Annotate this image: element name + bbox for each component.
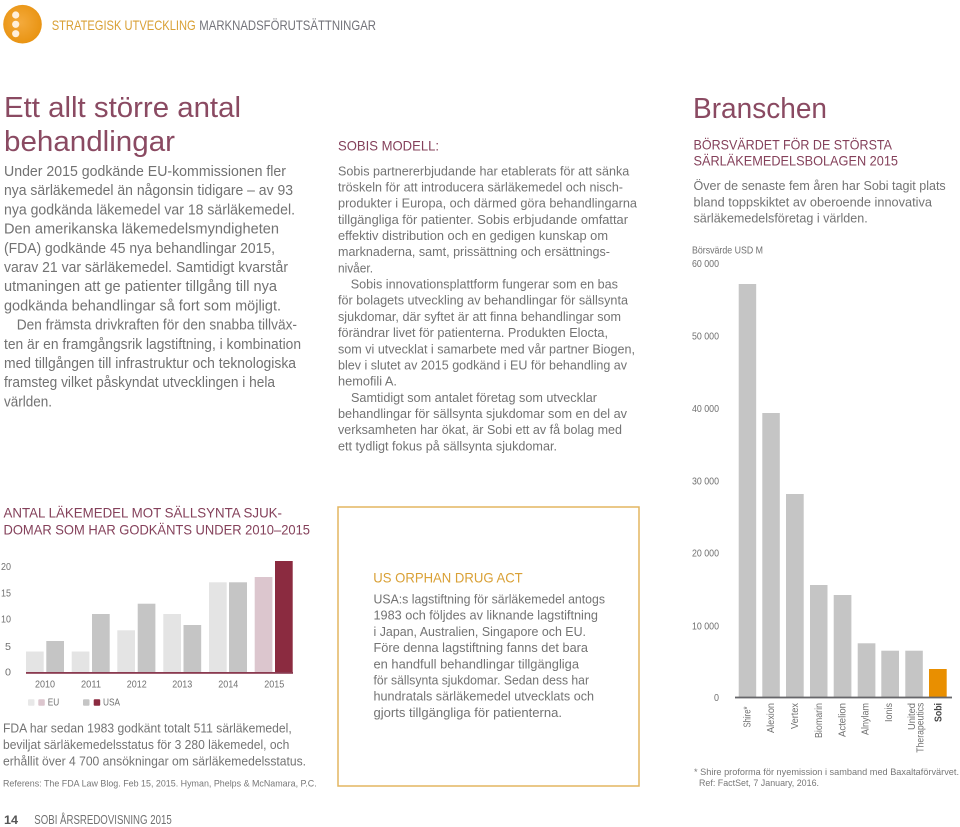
y axis labels: 60 000 [692,258,719,270]
y axis labels: 15 [1,588,11,600]
body text: godkända behandlingar så fort som möjligt. [4,298,281,314]
body text: i Japan, Australien, Singapore och EU. [374,624,586,639]
body text: framsteg vilket påskyndat utvecklingen i hela [4,375,276,391]
icon: orange circle with three dots [3,5,42,44]
company labels: Vertex [789,702,801,729]
y axis labels: 20 [1,561,11,573]
body text: med tillgången till infrastruktur och teknologiska [4,356,297,372]
body text: effektiv distribution och en gedigen kunskap om [338,228,608,243]
axis title: Börsvärde USD M [692,245,763,257]
heading: DOMAR SOM HAR GODKÄNTS UNDER 2010–2015 [4,521,310,537]
heading: Ett allt större antal [4,92,241,124]
body text: Den främsta drivkraften för den snabba tillväx- [17,318,297,334]
body text: produkter i Europa, och därmed göra behandlingarna [338,196,638,211]
y axis labels [1,561,11,679]
header [3,5,376,44]
FDA text [3,721,306,768]
y axis labels: 0 [5,667,11,679]
footnote: Ref: FactSet, 7 January, 2016. [699,778,819,789]
reference: Referens: The FDA Law Blog. Feb 15, 2015. Hyman, Phelps & McNamara, P.C. [3,778,317,789]
body text: för sällsynta sjukdomar. Sedan dess har [374,672,590,688]
heading [4,504,310,537]
intro text: Över de senaste fem åren har Sobi tagit plats [694,178,946,193]
subheading: BÖRSVÄRDET FÖR DE STÖRSTA [694,135,893,152]
body text: som vi utvecklat i samarbete med vår partner Biogen, [338,341,635,356]
heading: behandlingar [4,126,175,158]
legend: USA [103,697,120,709]
body text: varav 21 var särläkemedel. Samtidigt kvarstår [4,260,288,276]
body text: ett tydligt fokus på sällsynta sjukdomar. [338,438,557,453]
panel: Ett allt större antal behandlingar [4,92,301,410]
body text [374,592,605,720]
y axis labels: 40 000 [692,403,719,415]
company labels: United [906,703,918,730]
x axis labels: 2014 [218,678,238,690]
company labels: Alnylam [860,703,872,735]
heading: Branschen [693,93,827,125]
company labels: Ionis [883,703,895,722]
body text: nya godkända läkemedel var 18 särläkemedel. [4,202,295,218]
legend: EU [48,697,59,709]
bars [26,561,293,674]
y axis labels: 50 000 [692,330,719,342]
heading [4,92,241,158]
company labels: Actelion [837,703,849,737]
body text [338,163,638,453]
company labels: Therapeutics [914,703,926,753]
body text: (FDA) godkände 45 nya behandlingar 2015, [4,241,275,257]
body text: tröskeln för att introducera särläkemedel och nisch- [338,180,623,194]
panel: approved orphan drugs chart [1,504,317,789]
body text: nya särläkemedel än någonsin tidigare – av 93 [4,183,293,199]
section label: MARKNADSFÖRUTSÄTTNINGAR [199,16,376,33]
heading: ANTAL LÄKEMEDEL MOT SÄLLSYNTA SJUK- [4,504,282,520]
y axis labels: 30 000 [692,475,719,487]
body text: Samtidigt som antalet företag som utvecklar [351,390,598,405]
body text: Sobis innovationsplattform fungerar som en bas [351,277,618,292]
page footer: 14 [4,815,19,827]
y axis labels: 5 [5,641,11,653]
bar chart: market value [692,245,952,753]
box [338,507,639,786]
y axis labels: 20 000 [692,548,719,560]
body text: Den amerikanska läkemedelsmyndigheten [4,222,279,238]
y axis labels: 10 [1,614,11,626]
intro text: särläkemedelsföretag i världen. [694,210,868,225]
body text: hemofili A. [338,374,397,389]
panel: Branschen [692,93,959,789]
company labels: Sobi [933,703,945,722]
FDA text: FDA har sedan 1983 godkänt totalt 511 särläkemedel, [3,721,292,736]
body text: nivåer. [338,260,373,275]
body text: en handfull behandlingar tillgängliga [374,656,580,671]
body text: ten är en framgångsrik lagstiftning, i kombination [4,337,301,353]
page footer [4,812,172,827]
FDA text: erhållit över 4 700 ansökningar om särläkemedelsstatus. [3,754,306,768]
company labels [742,702,945,753]
bars [735,284,952,698]
page footer: SOBI ÅRSREDOVISNING 2015 [34,812,172,827]
body text: behandlingar för sällsynta sjukdomar som en del av [338,406,627,421]
body text: förändrar livet för patienterna. Produkten Elocta, [338,325,608,340]
company labels: Biomarin [813,703,825,738]
body text: USA:s lagstiftning för särläkemedel antogs [374,592,605,606]
heading: SOBIS MODELL: [338,138,439,154]
body text: Före denna lagstiftning fanns det bara [374,640,589,655]
x axis labels: 2013 [172,678,192,690]
body text: gjorts tillgängliga för patienterna. [374,705,562,720]
x axis labels: 2012 [127,678,147,690]
body text: Sobis partnererbjudande har etablerats för att sänka [338,163,630,178]
body text [4,164,301,410]
y axis labels [692,258,719,704]
panel: Sobis modell [338,138,638,453]
body text: Under 2015 godkände EU-kommissionen fler [4,164,286,180]
x axis labels: 2015 [264,678,284,690]
x axis labels: 2010 [35,678,55,690]
body text: utmaningen att ge patienter tillgång till nya [4,279,278,295]
body text: för bolagets utveckling av behandlingar för sällsynta [338,293,629,308]
body text: världen. [4,394,52,410]
company labels: Shire* [742,706,754,728]
body text: marknaderna, samt, prissättning och ersättnings- [338,244,610,259]
bar chart: approvals per year [1,561,293,709]
x axis labels [35,678,284,690]
body text: tillgängliga för patienter. Sobis erbjudande omfattar [338,212,629,227]
intro text [694,178,946,225]
footnote [694,767,959,789]
panel: US Orphan Drug Act [338,507,639,786]
body text: sjukdomar, där syftet är att finna behandlingar som [338,309,621,324]
body text: verksamheten har ökat, är Sobi ett av få bolag med [338,422,622,437]
legend [28,697,120,709]
company labels: Alexion [765,703,777,733]
heading: US ORPHAN DRUG ACT [373,570,523,586]
body text: blev i slutet av 2015 godkänd i EU för behandling av [338,358,627,372]
FDA text: beviljat särläkemedelsstatus för 3 280 läkemedel, och [3,737,289,752]
x axis labels: 2011 [81,678,101,690]
body text: hundratals särläkemedel utvecklats och [374,689,594,704]
subheading [694,135,898,168]
body text: 1983 och följdes av liknande lagstiftning [374,608,598,623]
subheading: SÄRLÄKEMEDELSBOLAGEN 2015 [694,152,898,168]
section label: STRATEGISK UTVECKLING [52,17,196,33]
section label [52,16,376,33]
y axis labels: 0 [714,692,719,704]
intro text: bland toppskiktet av oberoende innovativa [694,194,933,209]
y axis labels: 10 000 [692,620,719,632]
